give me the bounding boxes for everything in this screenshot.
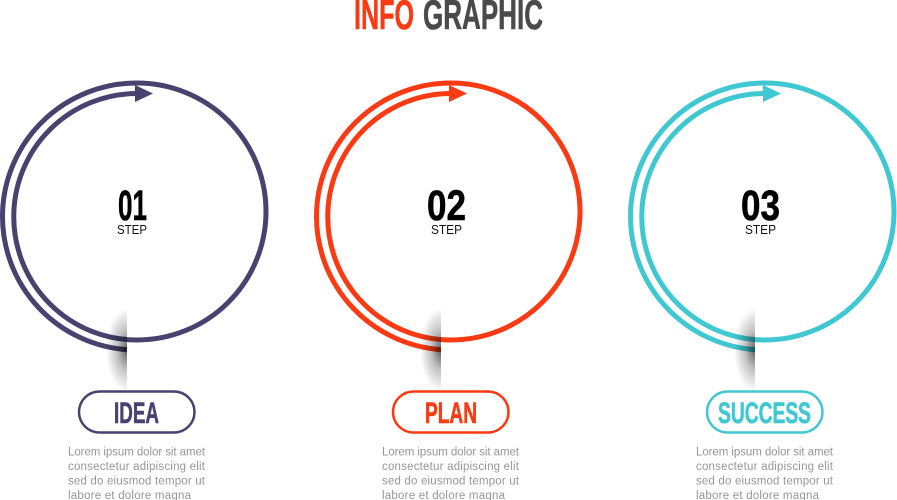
text block 3: Lorem ipsum dolor sit amet [696,446,834,458]
text block 2: consectetur adipiscing elit [382,461,520,473]
panel: step 2 plan [316,83,580,500]
step number 3: 03 [741,182,780,230]
pill: plan: PLAN [425,397,477,430]
fold shadow 1 [106,308,127,392]
text block 3: sed do eiusmod tempor ut [696,476,834,488]
step label 1: STEP [117,222,147,237]
spiral arrow ring 1 [2,83,266,350]
text block 2: Lorem ipsum dolor sit amet [382,446,520,458]
text block 3 [696,446,834,500]
pill: plan [393,392,508,432]
pill: success [707,392,822,432]
step number 1: 01 [118,182,147,230]
step label 2: STEP [431,222,462,237]
title [354,0,543,38]
text block 1: sed do eiusmod tempor ut [68,476,206,488]
text block 1: Lorem ipsum dolor sit amet [68,446,206,458]
pill: idea: IDEA [114,397,159,430]
pill: success: SUCCESS [718,397,811,430]
fold shadow 3 [734,308,755,392]
text block 1 [68,446,206,500]
panel: step 3 success [630,83,894,500]
pill: idea [79,392,194,432]
text block 2: sed do eiusmod tempor ut [382,476,520,488]
text block 3: consectetur adipiscing elit [696,461,834,473]
text block 1: consectetur adipiscing elit [68,461,206,473]
spiral arrow ring 2 [316,83,580,350]
step number 2: 02 [427,182,466,230]
fold shadow 2 [420,308,441,392]
step label 3: STEP [745,222,776,237]
panel: step 1 idea [2,83,266,500]
spiral arrow ring 3 [630,83,894,350]
text block 2 [382,446,520,500]
